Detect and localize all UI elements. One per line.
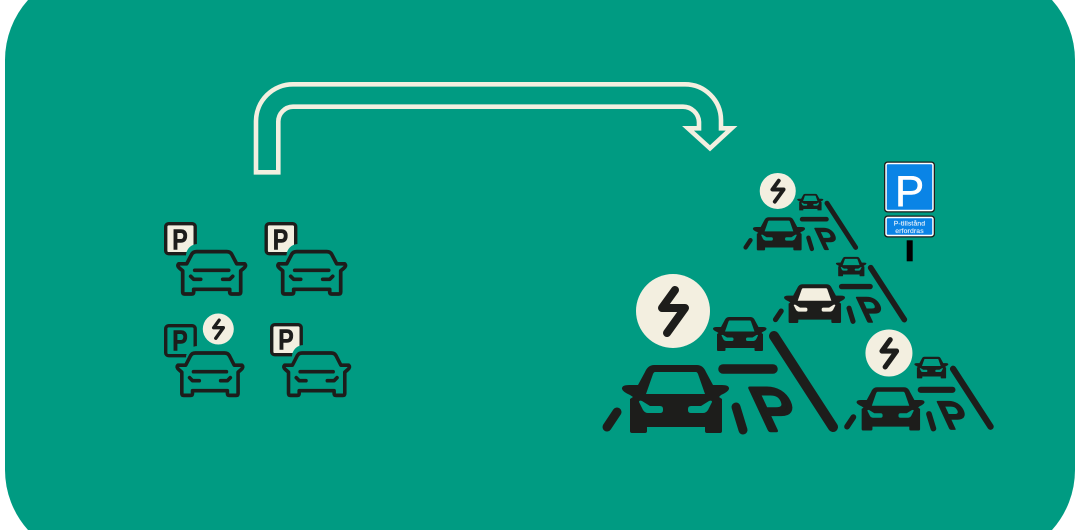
middle lot with occupied car: P bbox=[851, 290, 892, 329]
parking unit 2 bbox=[266, 223, 346, 294]
sign: blue P panel: P bbox=[895, 167, 924, 216]
right cluster: shared parking lots bbox=[607, 173, 991, 443]
parking unit 1 bbox=[166, 223, 246, 294]
large lot with charging bbox=[607, 274, 833, 443]
middle lot with occupied car bbox=[775, 257, 904, 329]
sign: permit required plate: erfordras bbox=[895, 228, 924, 235]
sign post bbox=[907, 240, 913, 261]
parking unit 4: P bbox=[278, 323, 294, 356]
top lot with charging: P bbox=[810, 222, 845, 256]
parking unit 3 with charging bbox=[166, 314, 243, 395]
lower right lot with charging: P bbox=[932, 395, 977, 437]
left cluster: separate parking places bbox=[166, 223, 349, 395]
top lot with charging bbox=[746, 173, 856, 256]
parking permit road sign bbox=[884, 162, 935, 261]
large lot with charging: P bbox=[740, 377, 811, 443]
sign: permit required plate bbox=[884, 216, 935, 238]
lower right lot with charging bbox=[847, 329, 991, 437]
parking unit 4 bbox=[272, 323, 349, 395]
arrow: from scattered parking to shared parking bbox=[256, 84, 732, 172]
sign: permit required plate: P-tillstånd bbox=[894, 220, 925, 228]
parking unit 2: P bbox=[273, 223, 288, 256]
parking unit 3 with charging: P bbox=[172, 324, 188, 357]
parking unit 1: P bbox=[172, 223, 188, 256]
